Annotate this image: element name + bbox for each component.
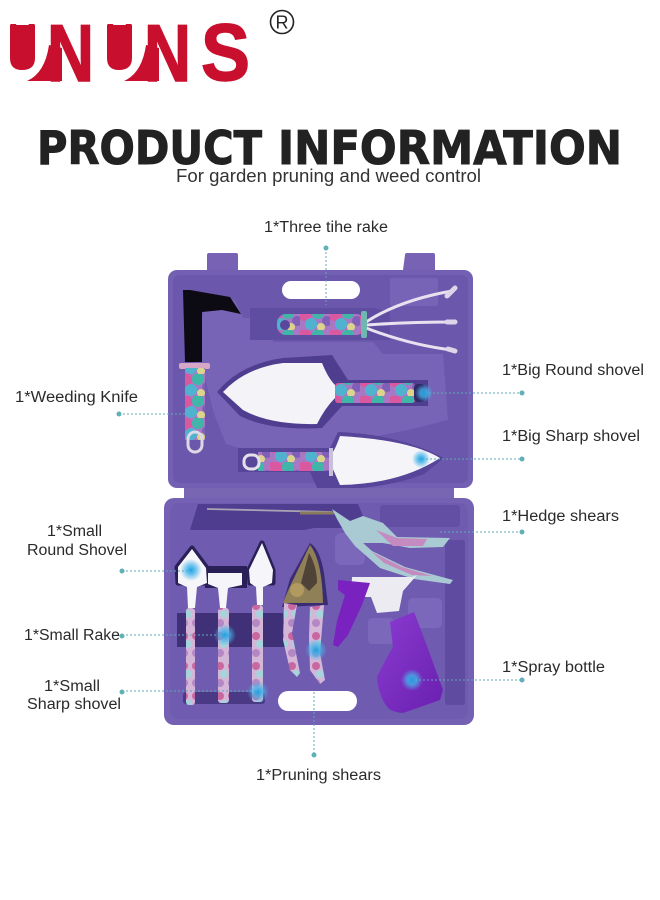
case bottom half	[164, 498, 474, 725]
label: weeding knife: 1*Weeding Knife	[15, 389, 138, 406]
leader end dots	[116, 246, 524, 758]
registered trademark mark	[270, 10, 294, 34]
label: hedge shears: 1*Hedge shears	[502, 508, 619, 525]
brand logo: N	[47, 9, 94, 99]
title	[37, 121, 622, 175]
label: pruning shears: 1*Pruning shears	[256, 767, 381, 784]
label: small round shovel: Round Shovel	[27, 542, 127, 559]
label: three tine rake: 1*Three tihe rake	[264, 219, 388, 236]
big round shovel	[223, 363, 425, 424]
brand logo: S	[201, 8, 250, 98]
case top half	[168, 253, 473, 490]
weeding knife	[179, 290, 241, 452]
three tine rake	[277, 288, 455, 351]
brand logo: U	[8, 10, 37, 83]
brand logo: U	[105, 10, 134, 83]
highlight markers	[180, 384, 433, 703]
tool case	[164, 253, 474, 725]
label: small round shovel: 1*Small	[47, 523, 102, 540]
registered trademark mark: R	[276, 12, 288, 32]
big sharp shovel	[244, 436, 440, 485]
label: big round shovel: 1*Big Round shovel	[502, 362, 644, 379]
small round shovel	[177, 548, 207, 705]
title: INFORMATION	[278, 121, 622, 175]
brand logo: N	[144, 9, 191, 99]
brand logo	[8, 8, 250, 99]
leader lines	[119, 248, 522, 755]
label: small rake: 1*Small Rake	[24, 627, 120, 644]
label: big sharp shovel: 1*Big Sharp shovel	[502, 428, 640, 445]
label: small sharp shovel: Sharp shovel	[27, 696, 121, 713]
case hinge	[184, 488, 454, 499]
label: small sharp shovel	[27, 678, 121, 713]
label: small sharp shovel: 1*Small	[44, 678, 100, 695]
label: small round shovel	[27, 523, 127, 559]
title: PRODUCT	[37, 121, 263, 175]
small sharp shovel	[249, 543, 273, 702]
spray bottle	[333, 575, 443, 713]
small rake	[208, 573, 242, 703]
label: spray bottle: 1*Spray bottle	[502, 659, 605, 676]
subtitle: For garden pruning and weed control	[176, 165, 481, 186]
pruning shears	[283, 545, 325, 684]
hedge shears	[207, 509, 453, 584]
